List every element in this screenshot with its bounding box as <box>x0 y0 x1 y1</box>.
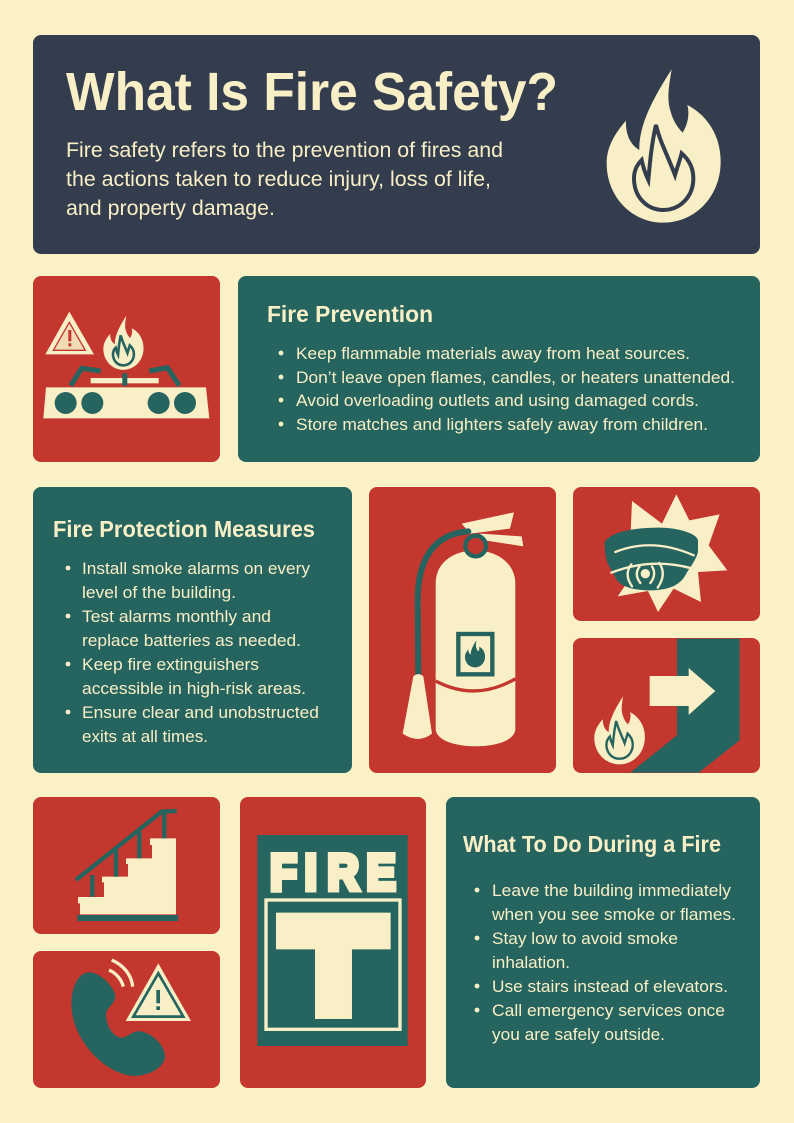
icon: staircase <box>76 811 178 921</box>
bullet list: prevention: Keep flammable materials away from heat sources. <box>296 344 690 363</box>
bullet list: protection <box>66 559 319 746</box>
panel: header <box>33 35 760 254</box>
icon: exit path and arrow <box>630 639 740 773</box>
bullet list: during a fire: you are safely outside. <box>492 1025 665 1044</box>
bullet list: protection: replace batteries as needed. <box>82 631 301 650</box>
bullet list: during a fire: inhalation. <box>492 953 570 972</box>
intro text: and property damage. <box>66 196 275 220</box>
bullet list: prevention <box>279 344 735 434</box>
bullet list: protection: Ensure clear and unobstructed <box>82 703 319 722</box>
bullet list: during a fire: Use stairs instead of elevators. <box>492 977 728 996</box>
panel: fire sign <box>240 797 426 1088</box>
heading: fire prevention: Fire Prevention <box>267 301 433 327</box>
icon: extinguisher <box>403 512 523 746</box>
panel: fire protection measures <box>33 487 352 773</box>
icon: gas stove <box>43 368 209 418</box>
icon: phone with warning <box>71 960 191 1076</box>
bullet list: protection: Keep fire extinguishers <box>82 655 259 674</box>
bullet list: prevention: Avoid overloading outlets and using damaged cords. <box>296 391 699 410</box>
panel: stairs <box>33 797 220 934</box>
bullet list: during a fire: Leave the building immediately <box>492 881 732 900</box>
bullet list: protection: level of the building. <box>82 583 236 602</box>
bullet list: protection: Install smoke alarms on every <box>82 559 310 578</box>
bullet list: prevention: Don’t leave open flames, candles, or heaters unattended. <box>296 368 735 387</box>
bullet list: during a fire: when you see smoke or flames. <box>491 905 736 924</box>
icon: smoke detector with burst <box>605 494 727 612</box>
icon: stove flame <box>103 316 144 370</box>
panel: emergency call <box>33 951 220 1088</box>
bullet list: protection: Test alarms monthly and <box>82 607 271 626</box>
panel: fire extinguisher <box>369 487 556 773</box>
panel: exit route <box>573 638 760 773</box>
icon: warning triangle <box>45 312 94 354</box>
icon: exit flame <box>594 696 645 764</box>
sign board <box>257 835 408 1046</box>
panel: smoke detector <box>573 487 760 621</box>
heading: during a fire: What To Do During a Fire <box>463 831 721 857</box>
bullet list: during a fire: Stay low to avoid smoke <box>492 929 678 948</box>
panel: fire prevention <box>238 276 760 462</box>
bullet list: protection: accessible in high-risk areas. <box>82 679 306 698</box>
icon: T sign <box>266 900 400 1029</box>
title: What Is Fire Safety? <box>66 62 558 122</box>
icon: label flame <box>465 640 485 667</box>
panel: stove illustration <box>33 276 220 462</box>
intro text <box>66 138 503 220</box>
icon: large flame <box>607 69 721 223</box>
panel: what to do during a fire <box>446 797 760 1088</box>
sign word: FIRE: FIRE <box>270 843 396 900</box>
bullet list: protection: exits at all times. <box>82 727 208 746</box>
bullet list: during a fire: Call emergency services once <box>492 1001 725 1020</box>
bullet list: during a fire <box>475 881 736 1044</box>
bullet list: prevention: Store matches and lighters safely away from children. <box>296 415 708 434</box>
intro text: the actions taken to reduce injury, loss of life, <box>66 167 491 191</box>
heading: protection measures: Fire Protection Measures <box>53 516 315 542</box>
intro text: Fire safety refers to the prevention of fires and <box>66 138 503 162</box>
